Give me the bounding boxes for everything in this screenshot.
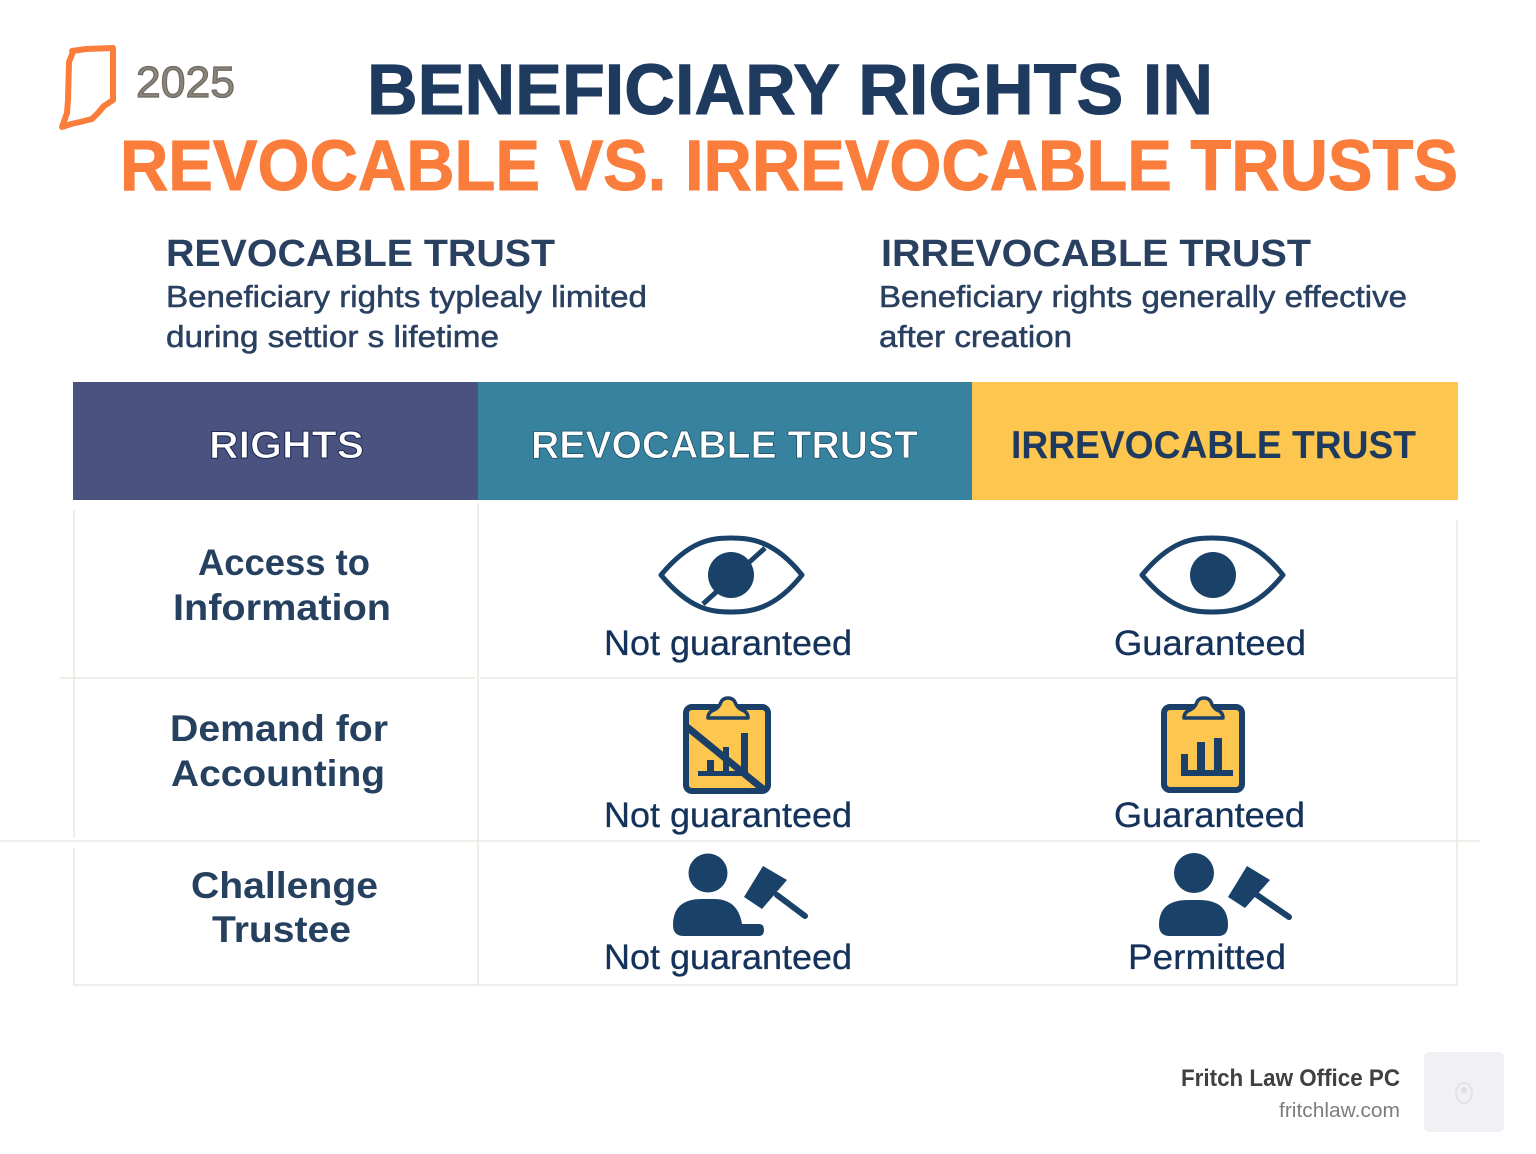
icon: clipboard chart bbox=[1164, 698, 1242, 790]
header: rights: RIGHTS bbox=[209, 424, 364, 467]
row label bbox=[173, 542, 391, 628]
summary: revocable trust bbox=[166, 233, 647, 354]
header: rights bbox=[73, 382, 478, 500]
icon: person with gavel, crossed bbox=[673, 854, 805, 936]
firm website: fritchlaw.com bbox=[1279, 1100, 1400, 1122]
firm name: Fritch Law Office PC bbox=[1181, 1065, 1400, 1092]
row label: Trustee bbox=[212, 909, 351, 950]
value: not guaranteed: Not guaranteed bbox=[604, 796, 852, 835]
row: access to information bbox=[173, 538, 1306, 663]
summary: irrevocable trust: after creation bbox=[879, 319, 1072, 354]
footer logo tile bbox=[1424, 1052, 1504, 1132]
row label: Accounting bbox=[171, 753, 385, 794]
year label: 2025 bbox=[136, 58, 235, 107]
row label bbox=[170, 708, 388, 794]
table bbox=[0, 382, 1480, 985]
value: guaranteed: Guaranteed bbox=[1114, 624, 1306, 663]
title: REVOCABLE VS. IRREVOCABLE TRUSTS bbox=[120, 127, 1458, 206]
summary: revocable trust: REVOCABLE TRUST bbox=[166, 233, 555, 275]
row label: Access to bbox=[198, 542, 370, 583]
value: permitted: Permitted bbox=[1128, 938, 1286, 977]
icon: crossed clipboard chart bbox=[686, 698, 768, 791]
value: not guaranteed: Not guaranteed bbox=[604, 624, 852, 663]
row label: Demand for bbox=[170, 708, 388, 749]
row: demand for accounting bbox=[170, 698, 1305, 835]
summary: irrevocable trust bbox=[879, 233, 1407, 354]
header: irrevocable trust: IRREVOCABLE TRUST bbox=[1011, 424, 1416, 467]
value: guaranteed: Guaranteed bbox=[1114, 796, 1305, 835]
summary: revocable trust: during settior s lifetime bbox=[166, 319, 499, 354]
row label: Information bbox=[173, 587, 391, 628]
footer brand bbox=[1181, 1052, 1504, 1132]
summary: irrevocable trust: Beneficiary rights generally effective bbox=[879, 279, 1407, 314]
row: challenge trustee bbox=[191, 853, 1289, 977]
title: BENEFICIARY RIGHTS IN bbox=[367, 51, 1213, 130]
summary: irrevocable trust: IRREVOCABLE TRUST bbox=[881, 233, 1311, 275]
icon: Indiana state outline bbox=[62, 48, 113, 127]
table grid lines bbox=[0, 503, 1480, 985]
icon: crossed eye bbox=[661, 538, 802, 612]
value: not guaranteed: Not guaranteed bbox=[604, 938, 852, 977]
header: irrevocable trust bbox=[972, 382, 1458, 500]
title bbox=[120, 51, 1458, 206]
summary: revocable trust: Beneficiary rights typlealy limited bbox=[166, 279, 647, 314]
header: revocable trust: REVOCABLE TRUST bbox=[531, 424, 918, 467]
icon: eye bbox=[1142, 538, 1283, 612]
header: revocable trust bbox=[478, 382, 972, 500]
row label bbox=[191, 865, 378, 950]
row label: Challenge bbox=[191, 865, 378, 906]
icon: person with gavel bbox=[1159, 853, 1289, 936]
